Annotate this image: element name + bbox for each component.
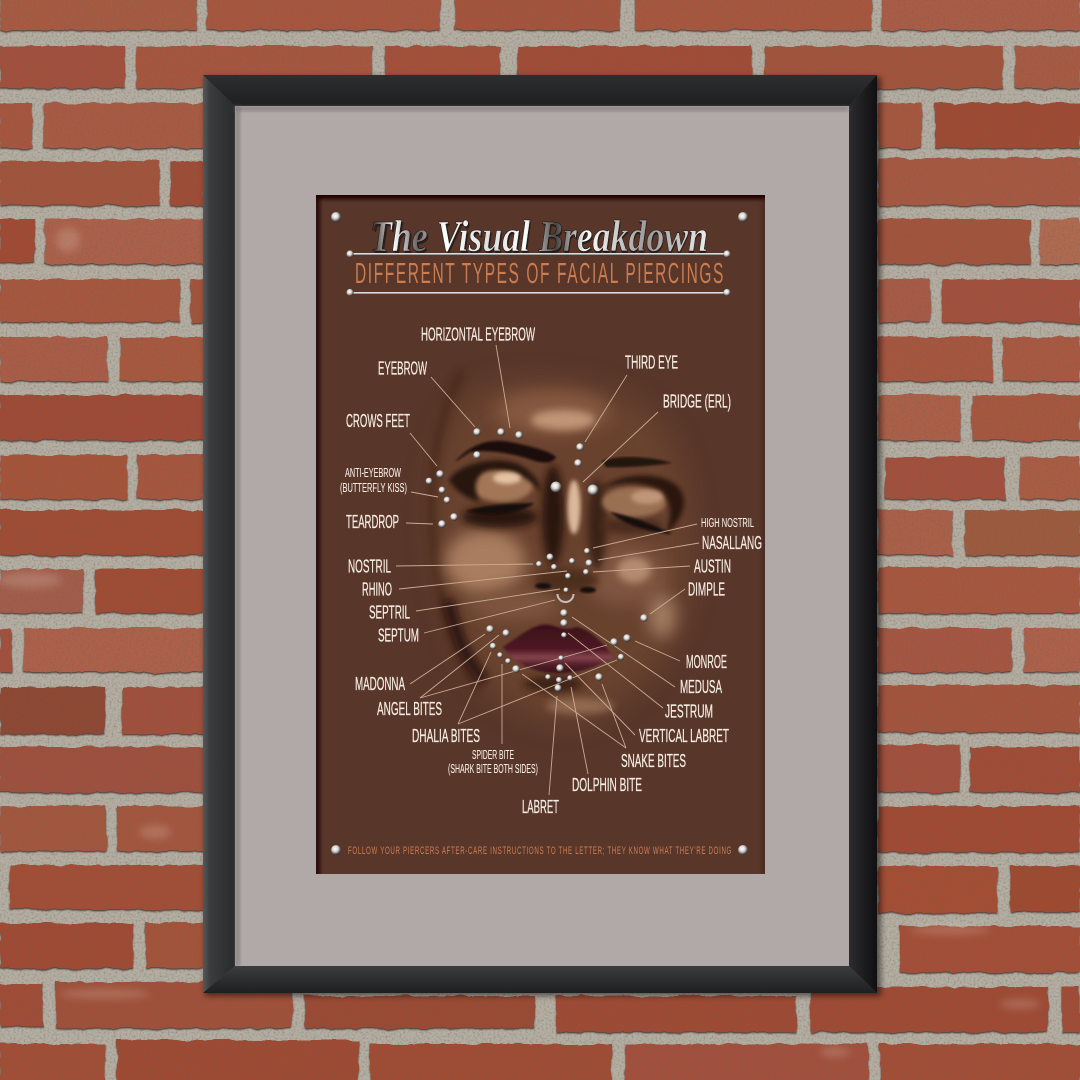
grey mat	[235, 106, 849, 966]
label: horizontal eyebrow: HORIZONTAL EYEBROW	[421, 324, 535, 344]
label: nasallang: NASALLANG	[702, 533, 762, 553]
label: dolphin bite: DOLPHIN BITE	[572, 775, 642, 795]
label: septum: SEPTUM	[378, 626, 419, 646]
label: madonna: MADONNA	[355, 674, 405, 694]
label: jestrum: JESTRUM	[665, 702, 713, 722]
label: high nostril	[593, 515, 754, 548]
label: anti-eyebrow: ANTI-EYEBROW	[345, 465, 401, 480]
label: jestrum	[568, 633, 713, 722]
label: dimple	[650, 580, 725, 614]
label: crows feet: CROWS FEET	[346, 411, 410, 431]
label: dhalia bites: DHALIA BITES	[412, 726, 480, 746]
label: bridge	[583, 392, 731, 482]
label: medusa	[572, 617, 722, 697]
frame shadow on wall	[205, 77, 881, 996]
label: nasallang	[598, 533, 762, 560]
label: horizontal eyebrow	[421, 324, 535, 428]
title rules with studs	[346, 250, 731, 296]
piercing studs on face	[426, 428, 648, 692]
label: bridge: BRIDGE (ERL)	[663, 392, 731, 412]
label: madonna	[355, 634, 485, 694]
hairline strokes	[431, 372, 478, 690]
label: teardrop: TEARDROP	[346, 512, 399, 532]
label: medusa: MEDUSA	[680, 677, 722, 697]
lips	[503, 625, 614, 673]
label: dolphin bite	[571, 687, 642, 795]
label: spider bite: SPIDER BITE	[472, 747, 514, 762]
label: third eye: THIRD EYE	[625, 352, 678, 372]
right eye	[602, 487, 666, 517]
label: rhino: RHINO	[362, 580, 392, 600]
left eye	[471, 468, 533, 502]
illustration: face	[431, 372, 691, 722]
footer note: FOLLOW YOUR PIERCERS AFTER-CARE INSTRUCTIONS TO THE LETTER; THEY KNOW WHAT THEY'RE DOING	[348, 845, 732, 857]
label: spider bite: (SHARK BITE BOTH SIDES)	[448, 761, 538, 776]
septum ring	[558, 594, 574, 602]
picture frame	[203, 75, 877, 993]
title: The Visual Breakdown	[370, 212, 708, 261]
label: snake bites	[522, 674, 686, 771]
subtitle: DIFFERENT TYPES OF FACIAL PIERCINGS	[355, 258, 725, 290]
label: monroe	[635, 641, 727, 672]
label: dhalia bites	[412, 652, 617, 746]
label: eyebrow: EYEBROW	[378, 358, 427, 378]
label: labret: LABRET	[522, 797, 559, 817]
label: dimple: DIMPLE	[688, 580, 725, 600]
label: vertical labret	[565, 663, 729, 746]
label: high nostril: HIGH NOSTRIL	[701, 515, 754, 530]
corner studs	[331, 212, 748, 855]
label: third eye	[585, 352, 678, 442]
jaw and chin	[448, 600, 485, 680]
piercing labels and leader lines	[340, 324, 762, 817]
cheeks	[445, 530, 525, 594]
label: septril: SEPTRIL	[369, 602, 410, 622]
eye sockets and nose shading	[542, 465, 564, 565]
label: eyebrow	[378, 358, 475, 427]
label: monroe: MONROE	[686, 652, 727, 672]
label: austin: AUSTIN	[694, 556, 731, 576]
label: septum	[378, 600, 555, 646]
label: snake bites: SNAKE BITES	[621, 751, 686, 771]
label: nostril: NOSTRIL	[348, 556, 391, 576]
title: The Visual Breakdown	[372, 214, 708, 263]
label: austin	[593, 556, 731, 576]
nose	[568, 480, 580, 534]
poster panel	[312, 190, 769, 880]
label: spider bite	[448, 664, 538, 776]
eyebrows	[455, 441, 556, 463]
label: anti-eyebrow	[340, 465, 438, 497]
label: angel bites	[377, 635, 607, 719]
label: crows feet	[346, 411, 437, 466]
label: anti-eyebrow: (BUTTERFLY KISS)	[340, 480, 407, 495]
label: labret	[522, 696, 559, 817]
label: vertical labret: VERTICAL LABRET	[639, 726, 729, 746]
label: septril	[369, 589, 560, 622]
label: angel bites: ANGEL BITES	[377, 699, 442, 719]
label: rhino	[362, 571, 567, 600]
